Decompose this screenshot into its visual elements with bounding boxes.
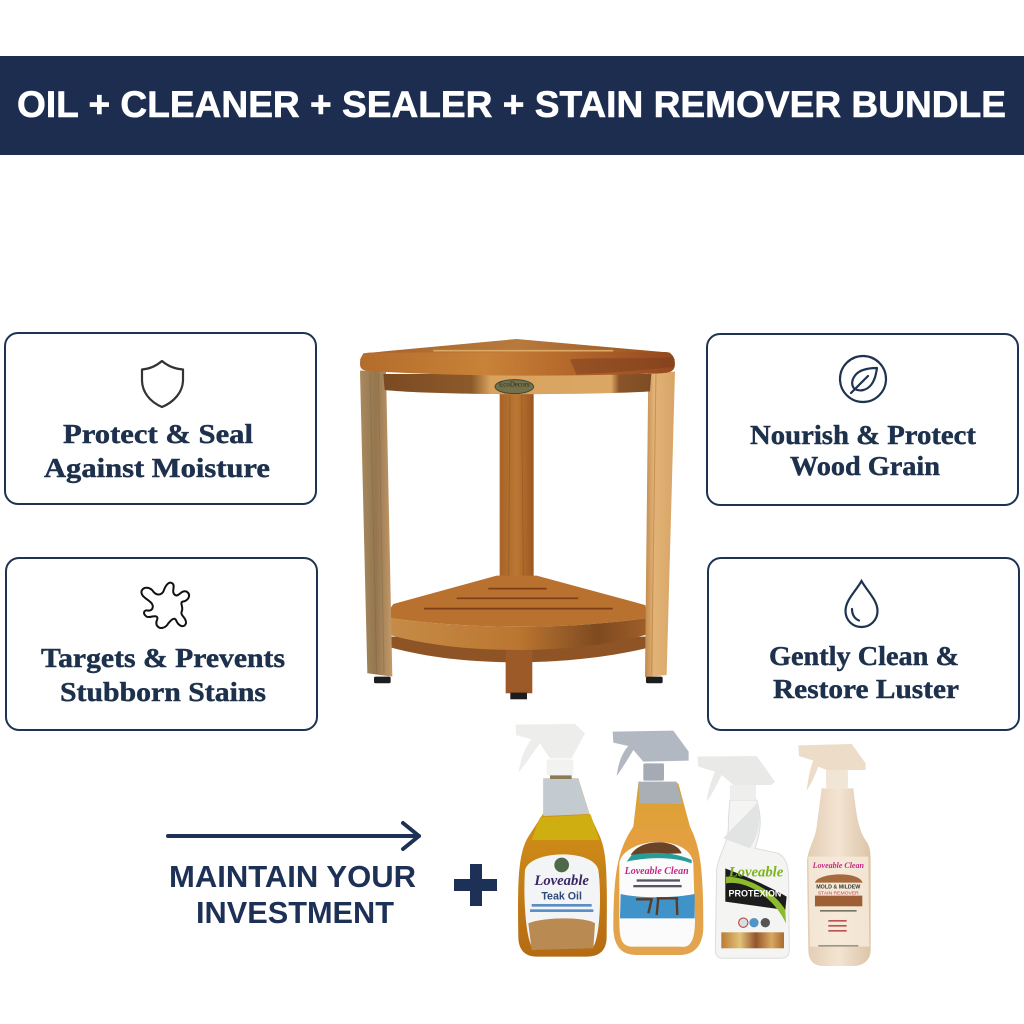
panel: nourish and protect [707, 334, 1018, 505]
product bottles [516, 724, 871, 966]
leg feet [374, 677, 391, 683]
right leg [645, 372, 675, 677]
brand badge [495, 380, 534, 394]
bottle: teak oil: Teak Oil [541, 890, 582, 902]
arrow [168, 823, 419, 849]
benefit text: Protect & Seal [63, 419, 254, 449]
bottle: stain remover: STAIN REMOVER [818, 890, 859, 896]
panel: protect and seal [5, 333, 316, 504]
bottle: sealer: PROTEXION [729, 889, 781, 899]
bottle: teak oil [516, 724, 607, 957]
benefit text: Targets & Prevents [41, 643, 285, 673]
bottle: stain remover [798, 744, 871, 966]
plus sign [454, 864, 497, 906]
center foot [506, 650, 532, 693]
bottle: sealer: Loveable [728, 865, 784, 881]
icon: shield [142, 361, 183, 407]
seat edge [360, 352, 675, 376]
bottle: sealer [697, 756, 789, 958]
benefit text: Nourish & Protect [750, 420, 976, 450]
benefit text: Stubborn Stains [60, 677, 266, 707]
lower shelf slats [424, 589, 613, 609]
bottle: stain remover: MOLD & MILDEW [816, 885, 861, 891]
seat top [360, 339, 675, 360]
benefit text: Against Moisture [44, 453, 270, 483]
caption: MAINTAIN YOUR [169, 859, 416, 894]
lower shelf front [384, 617, 652, 650]
under-shelf rail [389, 637, 647, 662]
panel: targets stains [6, 558, 317, 730]
left leg [360, 371, 392, 677]
back leg [500, 393, 534, 580]
bottle: cleaner [613, 731, 703, 955]
bottle: stain remover: Loveable Clean [812, 861, 864, 870]
teak corner stool [360, 339, 675, 699]
benefit text: Gently Clean & [769, 641, 959, 671]
bottle: teak oil: Loveable [533, 873, 589, 889]
icon: stain splat [141, 583, 189, 628]
caption: INVESTMENT [196, 895, 394, 930]
panel: gently clean [708, 558, 1019, 730]
benefit text: Wood Grain [790, 451, 940, 481]
icon: leaf in circle [840, 356, 886, 402]
teak corner stool: EcoDecors [499, 381, 530, 389]
apron [383, 374, 651, 394]
bottle: cleaner: Loveable Clean [624, 866, 689, 877]
title banner [0, 56, 1024, 155]
lower shelf top [384, 576, 652, 627]
title: OIL + CLEANER + SEALER + STAIN REMOVER BUNDLE [17, 84, 1006, 125]
icon: water drop [846, 581, 878, 627]
benefit text: Restore Luster [773, 674, 959, 704]
